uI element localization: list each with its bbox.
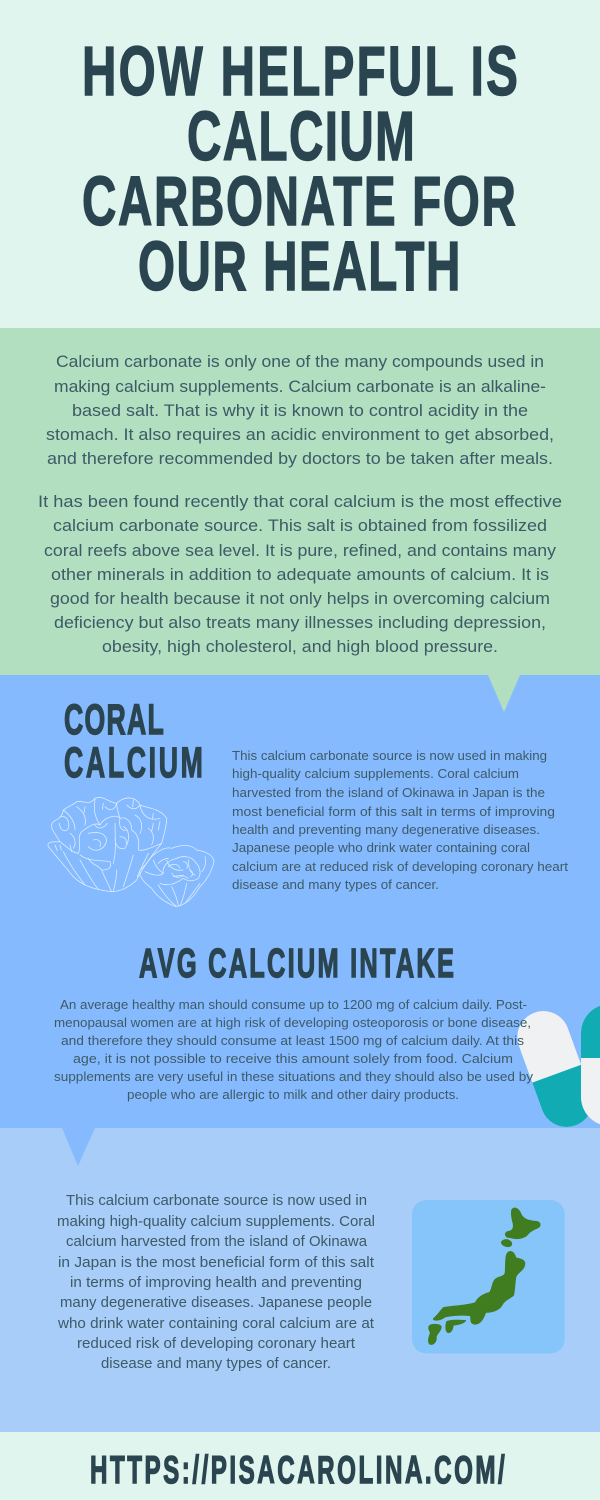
text block: introduction paragraph one: based salt. That is why it is known to control acidity in the bbox=[72, 402, 528, 420]
text block: coral calcium description bbox=[232, 748, 568, 892]
panel: coral calcium and intake background bbox=[0, 675, 600, 1128]
title: HOW HELPFUL IS bbox=[82, 32, 518, 110]
text block: introduction paragraph one bbox=[46, 353, 554, 468]
text block: introduction paragraph one: stomach. It also requires an acidic environment to get absorbed, bbox=[46, 426, 554, 444]
heading: average calcium intake: AVG CALCIUM INTAKE bbox=[139, 941, 454, 987]
text block: introduction paragraph one: making calcium supplements. Calcium carbonate is an alkaline- bbox=[54, 378, 546, 396]
text block: calcium intake description: An average healthy man should consume up to 1200 mg of calcium daily. Post- bbox=[60, 997, 527, 1012]
title: CALCIUM bbox=[187, 97, 415, 175]
text block: introduction paragraph two: It has been found recently that coral calcium is the most effective bbox=[38, 493, 562, 511]
text block: Japan description: calcium harvested from the island of Okinawa bbox=[66, 1234, 368, 1250]
text block: calcium intake description: age, it is not possible to receive this amount solely from food. Calcium bbox=[73, 1051, 513, 1066]
text block: Japan description: making high-quality calcium supplements. Coral bbox=[57, 1214, 375, 1230]
arrow: green pointer bbox=[488, 675, 520, 712]
text block: introduction paragraph two: calcium carbonate source. This salt is obtained from fossilized bbox=[53, 517, 547, 535]
text block: coral calcium description: disease and many types of cancer. bbox=[232, 877, 439, 892]
heading: coral calcium: CORAL bbox=[64, 696, 164, 744]
text block: Japan description: disease and many types of cancer. bbox=[101, 1356, 331, 1372]
text block: coral calcium description: calcium are at reduced risk of developing coronary heart bbox=[232, 859, 568, 874]
footer: website address: HTTPS://PISACAROLINA.COM/ bbox=[90, 1448, 505, 1491]
text block: coral calcium description: harvested from the island of Okinawa in Japan is the bbox=[232, 785, 545, 800]
heading: coral calcium: CALCIUM bbox=[64, 739, 203, 787]
text block: Japan description: in terms of improving health and preventing bbox=[70, 1275, 362, 1291]
text block: coral calcium description: Japanese people who drink water containing coral bbox=[232, 840, 530, 855]
text block: coral calcium description: most beneficial form of this salt in terms of improving bbox=[232, 804, 555, 819]
panel: Japan background bbox=[0, 1128, 600, 1432]
title: CARBONATE FOR bbox=[82, 162, 516, 240]
text block: Japan description: reduced risk of developing coronary heart bbox=[77, 1336, 355, 1352]
text block: introduction paragraph one: and therefore recommended by doctors to be taken after meals. bbox=[47, 450, 553, 468]
panel: introduction background bbox=[0, 328, 600, 675]
text block: introduction paragraph two: obesity, high cholesterol, and high blood pressure. bbox=[102, 638, 498, 656]
icon: coral illustration bbox=[48, 797, 214, 907]
text block: coral calcium description: This calcium carbonate source is now used in making bbox=[232, 748, 547, 763]
text block: calcium intake description bbox=[54, 997, 534, 1102]
text block: coral calcium description: high-quality calcium supplements. Coral calcium bbox=[232, 766, 519, 781]
icon: map of Japan bbox=[412, 1200, 565, 1353]
title bbox=[82, 32, 518, 305]
text block: introduction paragraph one: Calcium carbonate is only one of the many compounds used in bbox=[56, 353, 544, 371]
text block: calcium intake description: supplements are very useful in these situations and they should also be used by bbox=[54, 1069, 534, 1084]
text block: Japan description: who drink water containing coral calcium are at bbox=[57, 1316, 374, 1332]
text block: introduction paragraph two: good for health because it not only helps in overcoming calcium bbox=[50, 590, 550, 608]
panel: footer background bbox=[0, 1432, 600, 1500]
text block: introduction paragraph two bbox=[38, 493, 562, 656]
icon: left capsule bbox=[510, 1004, 600, 1134]
text block: Japan description: This calcium carbonate source is now used in bbox=[66, 1193, 367, 1209]
text block: calcium intake description: people who are allergic to milk and other dairy products. bbox=[127, 1087, 459, 1102]
text block: Japan description bbox=[57, 1193, 375, 1372]
text block: coral calcium description: health and preventing many degenerative diseases. bbox=[232, 822, 540, 837]
text block: calcium intake description: and therefore they should consume at least 1500 mg of calcium daily. At this bbox=[61, 1033, 525, 1048]
icon: right capsule bbox=[581, 1004, 600, 1126]
text block: calcium intake description: menopausal women are at high risk of developing osteoporosis or bone disease, bbox=[54, 1015, 531, 1030]
text block: Japan description: many degenerative diseases. Japanese people bbox=[60, 1295, 372, 1311]
text block: Japan description: in Japan is the most beneficial form of this salt bbox=[58, 1255, 374, 1271]
text block: introduction paragraph two: deficiency but also treats many illnesses including depression, bbox=[54, 614, 546, 632]
title: OUR HEALTH bbox=[138, 227, 460, 305]
icon: capsules bbox=[510, 1004, 600, 1134]
text block: introduction paragraph two: coral reefs above sea level. It is pure, refined, and contains many bbox=[44, 542, 557, 560]
heading: coral calcium bbox=[64, 696, 203, 787]
panel: title background bbox=[0, 0, 600, 328]
text block: introduction paragraph two: other minerals in addition to adequate amounts of calcium. It is bbox=[51, 566, 549, 584]
arrow: blue pointer bbox=[62, 1128, 95, 1166]
